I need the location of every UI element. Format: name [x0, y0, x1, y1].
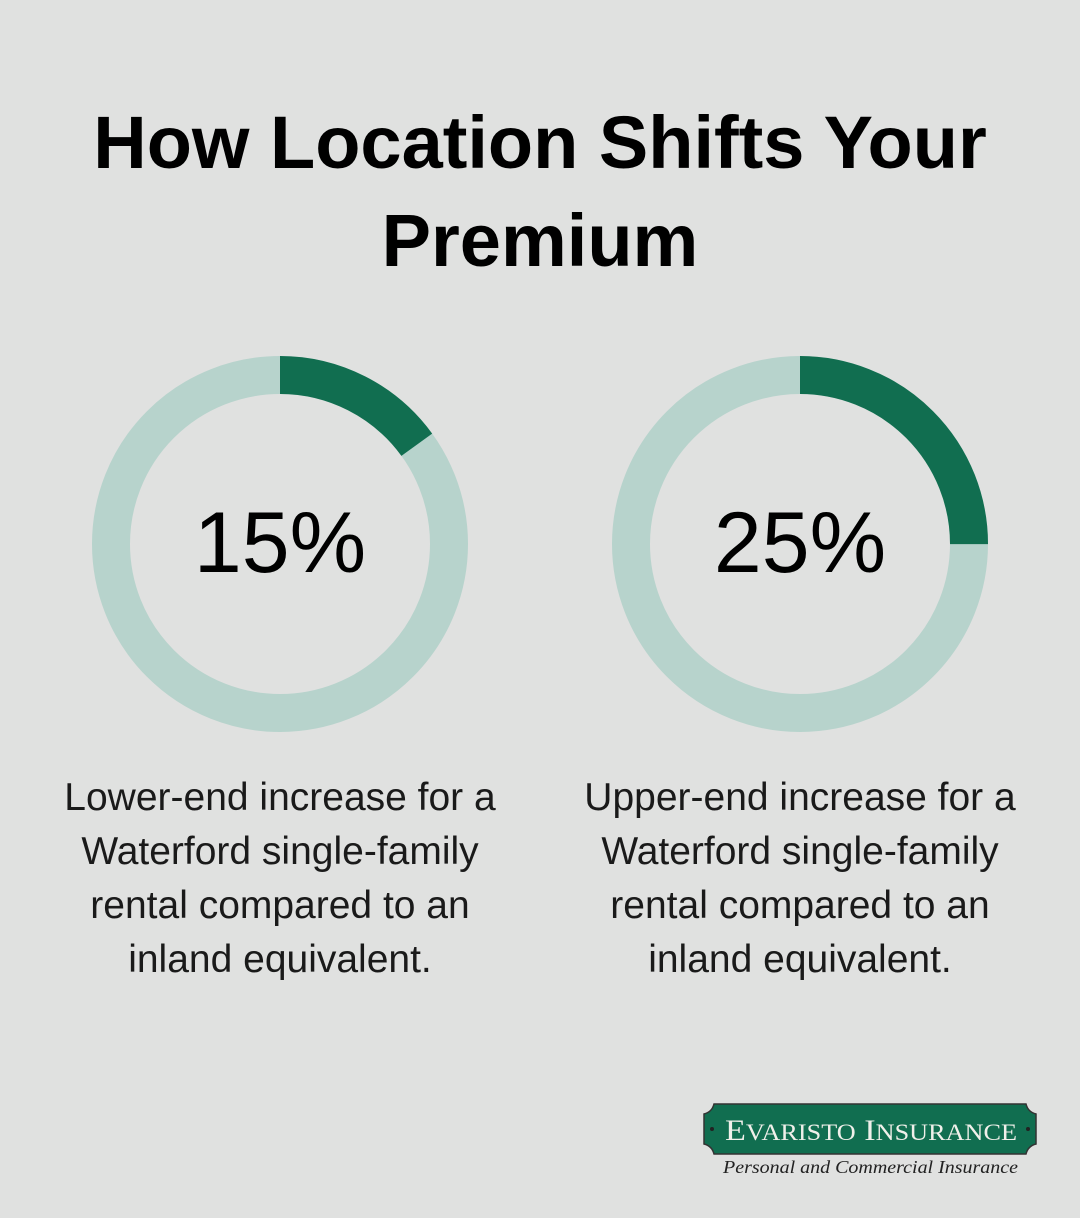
title: How Location Shifts Your — [93, 101, 987, 184]
chart: 25% donut — [612, 356, 988, 732]
text: upper-end description: inland equivalent. — [648, 938, 952, 981]
chart: 15% donut: 15% — [194, 495, 366, 591]
chart: 25% donut: 25% — [714, 495, 886, 591]
logo: EVARISTO INSURANCE — [725, 1114, 1017, 1147]
logo: Personal and Commercial Insurance — [722, 1157, 1018, 1177]
text: lower-end description: Waterford single-family — [81, 830, 479, 873]
logo — [703, 1103, 1037, 1177]
text: upper-end description: Upper-end increase for a — [584, 776, 1016, 819]
chart: 15% donut — [92, 356, 468, 732]
title: Premium — [382, 199, 698, 282]
text: lower-end description — [64, 776, 496, 981]
title — [93, 101, 987, 282]
text: upper-end description: Waterford single-family — [601, 830, 999, 873]
text: upper-end description: rental compared to an — [610, 884, 990, 927]
text: lower-end description: rental compared to an — [90, 884, 470, 927]
text: lower-end description: Lower-end increase for a — [64, 776, 496, 819]
text: upper-end description — [584, 776, 1016, 981]
text: lower-end description: inland equivalent. — [128, 938, 432, 981]
